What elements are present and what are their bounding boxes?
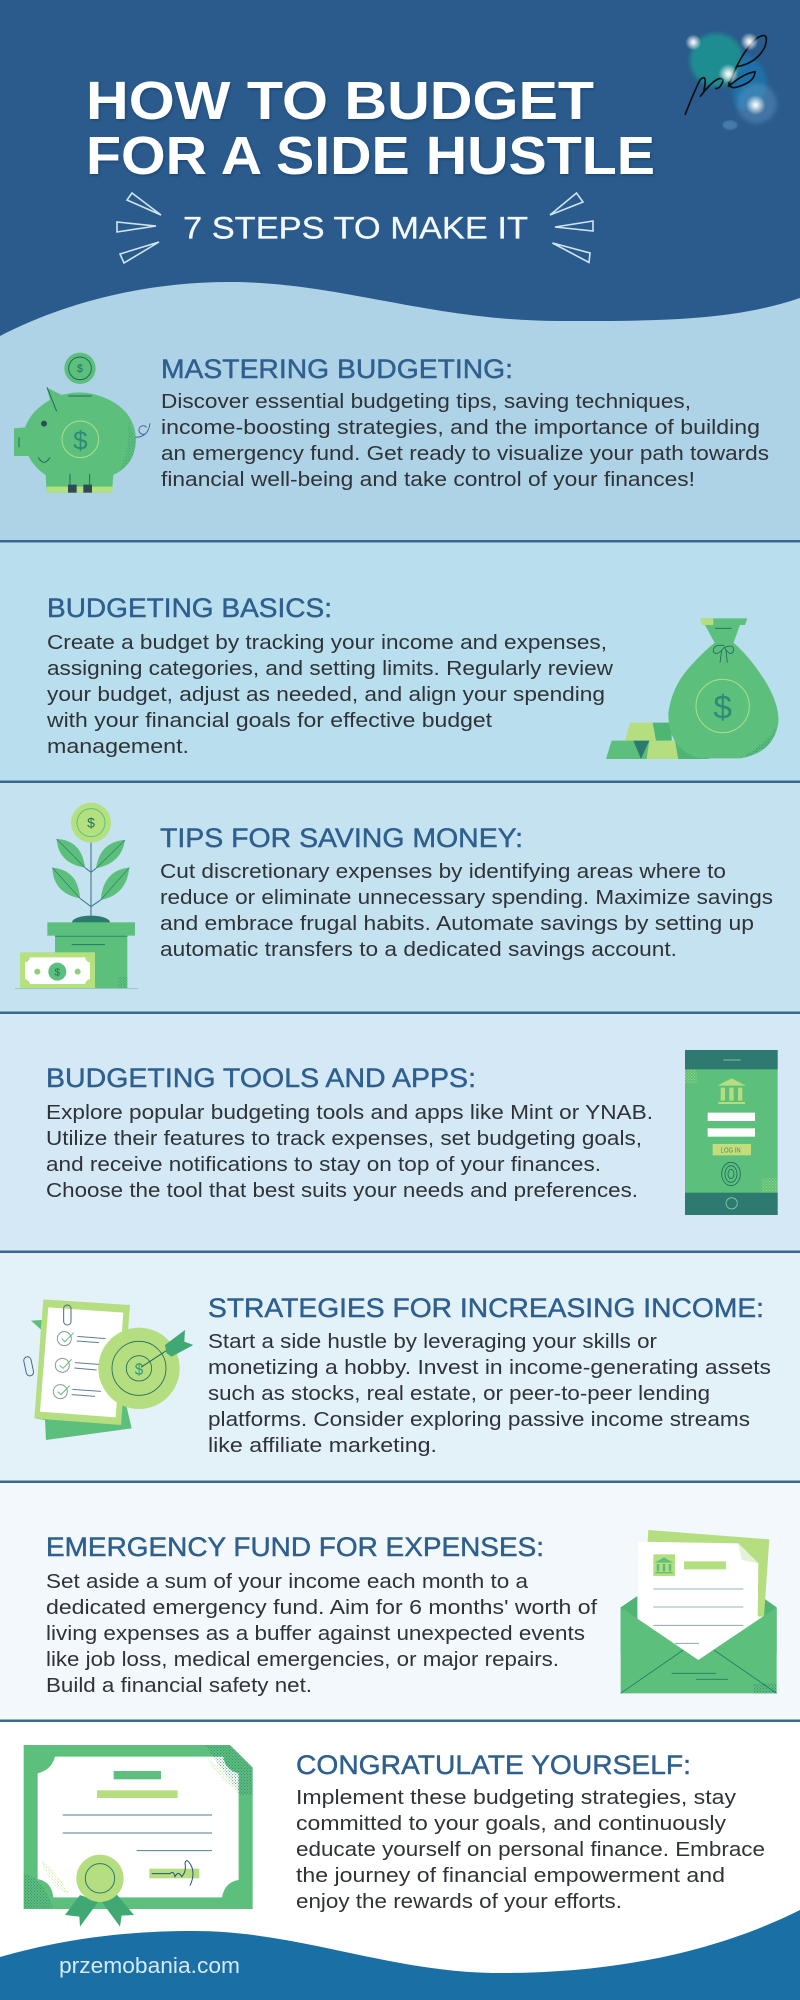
text block: mastering budgeting: an emergency fund. Get ready to visualize your path towards [161, 442, 769, 465]
text block: budgeting basics: your budget, adjust as needed, and align your spending [47, 683, 605, 706]
text block: congratulate yourself [296, 1786, 765, 1913]
icon: open envelope with document [621, 1530, 777, 1693]
text block: emergency fund for expenses: Build a financial safety net. [46, 1674, 312, 1697]
icon: phone with banking login: LOG IN [721, 1145, 741, 1154]
text block: budgeting tools and apps: Explore popular budgeting tools and apps like Mint or YNAB. [46, 1101, 653, 1124]
text block: budgeting tools and apps: Utilize their features to track expenses, set budgeting goals, [46, 1127, 642, 1150]
text block: tips for saving money: Cut discretionary expenses by identifying areas where to [160, 860, 726, 883]
text block: congratulate yourself: educate yourself on personal finance. Embrace [296, 1838, 765, 1861]
subtitle: 7 STEPS TO MAKE IT [183, 210, 528, 246]
text block: strategies for increasing income: like affiliate marketing. [208, 1434, 437, 1457]
text block: strategies for increasing income: Start a side hustle by leveraging your skills or [208, 1330, 657, 1353]
title: HOW TO BUDGET [86, 71, 594, 131]
heading: tips for saving money: TIPS FOR SAVING MONEY: [160, 823, 523, 853]
text block: congratulate yourself: the journey of financial empowerment and [296, 1864, 725, 1887]
panel: strategies for increasing income [0, 1253, 800, 1481]
text block: budgeting basics: Create a budget by tracking your income and expenses, [47, 631, 607, 654]
text block: budgeting tools and apps [46, 1101, 653, 1202]
text block: congratulate yourself: committed to your goals, and continuously [296, 1812, 727, 1835]
icon: money plant in pot with banknote [15, 803, 138, 989]
heading: congratulate yourself: CONGRATULATE YOURSELF: [296, 1750, 691, 1780]
icon: money bag and gold bars [606, 618, 779, 759]
panel: mastering budgeting [0, 270, 800, 541]
text block: tips for saving money [160, 860, 773, 961]
dividers [0, 540, 800, 1722]
text block: strategies for increasing income [208, 1330, 771, 1457]
text block: tips for saving money: automatic transfers to a dedicated savings account. [160, 938, 677, 961]
heading: emergency fund for expenses: EMERGENCY FUND FOR EXPENSES: [46, 1532, 544, 1562]
icon: certificate with seal [24, 1745, 253, 1927]
text block: emergency fund for expenses: like job loss, medical emergencies, or major repairs. [46, 1648, 559, 1671]
text block: emergency fund for expenses: living expenses as a buffer against unexpected events [46, 1622, 585, 1645]
text block: budgeting tools and apps: and receive notifications to stay on top of your finances. [46, 1153, 601, 1176]
icon: piggy bank: $ [73, 426, 88, 456]
text block: emergency fund for expenses: dedicated emergency fund. Aim for 6 months' worth of [46, 1596, 597, 1619]
panel: header [0, 0, 800, 336]
text block: emergency fund for expenses: Set aside a sum of your income each month to a [46, 1570, 529, 1593]
panel: tips for saving money [0, 783, 800, 1012]
heading: budgeting tools and apps: BUDGETING TOOLS AND APPS: [46, 1063, 476, 1093]
text block: budgeting basics [46, 631, 613, 758]
text block: congratulate yourself: enjoy the rewards of your efforts. [296, 1890, 622, 1913]
title [86, 71, 655, 186]
icon: piggy bank [14, 353, 150, 493]
text block: budgeting basics: assigning categories, and setting limits. Regularly review [47, 657, 613, 680]
text block: strategies for increasing income: platforms. Consider exploring passive income streams [208, 1408, 750, 1431]
text block: mastering budgeting [161, 390, 769, 491]
text block: budgeting tools and apps: Choose the tool that best suits your needs and preferences. [46, 1179, 638, 1202]
title: FOR A SIDE HUSTLE [86, 126, 655, 186]
text block: strategies for increasing income: monetizing a hobby. Invest in income-generating assets [208, 1356, 771, 1379]
panel: budgeting tools and apps [0, 1014, 800, 1251]
text block: emergency fund for expenses [46, 1570, 597, 1697]
icon: phone with banking login [685, 1050, 778, 1215]
text block: mastering budgeting: financial well-being and take control of your finances! [161, 468, 695, 491]
text block: tips for saving money: reduce or eliminate unnecessary spending. Maximize savings [160, 886, 773, 909]
icon: logo [685, 33, 777, 130]
text block: strategies for increasing income: such as stocks, real estate, or peer-to-peer lending [208, 1382, 710, 1405]
footer wave [0, 1910, 800, 2000]
text block: mastering budgeting: income-boosting strategies, and the importance of building [161, 416, 760, 439]
icon: checklist and target [23, 1299, 193, 1440]
text block: mastering budgeting: Discover essential budgeting tips, saving techniques, [161, 390, 691, 413]
icon: money bag and gold bars: $ [713, 689, 732, 726]
text block: tips for saving money: and embrace frugal habits. Automate savings by setting up [160, 912, 754, 935]
heading: mastering budgeting: MASTERING BUDGETING: [161, 354, 513, 384]
text block: budgeting basics: management. [47, 735, 189, 758]
icon: checklist and target: $ [135, 1361, 144, 1378]
text block: congratulate yourself: Implement these budgeting strategies, stay [296, 1786, 737, 1809]
panel: budgeting basics [0, 542, 800, 781]
heading: strategies for increasing income: STRATEGIES FOR INCREASING INCOME: [208, 1293, 764, 1323]
icon: piggy bank: $ [77, 363, 83, 375]
icon: burst marks [117, 193, 593, 263]
panel: emergency fund for expenses [0, 1483, 800, 1720]
heading: budgeting basics: BUDGETING BASICS: [47, 593, 332, 623]
panel: congratulate yourself [0, 1722, 800, 2000]
footer website: przemobania.com [59, 1953, 240, 1978]
text block: budgeting basics: with your financial goals for effective budget [46, 709, 492, 732]
icon: money plant in pot with banknote: $ [87, 815, 95, 831]
icon: money plant in pot with banknote: $ [55, 967, 61, 978]
